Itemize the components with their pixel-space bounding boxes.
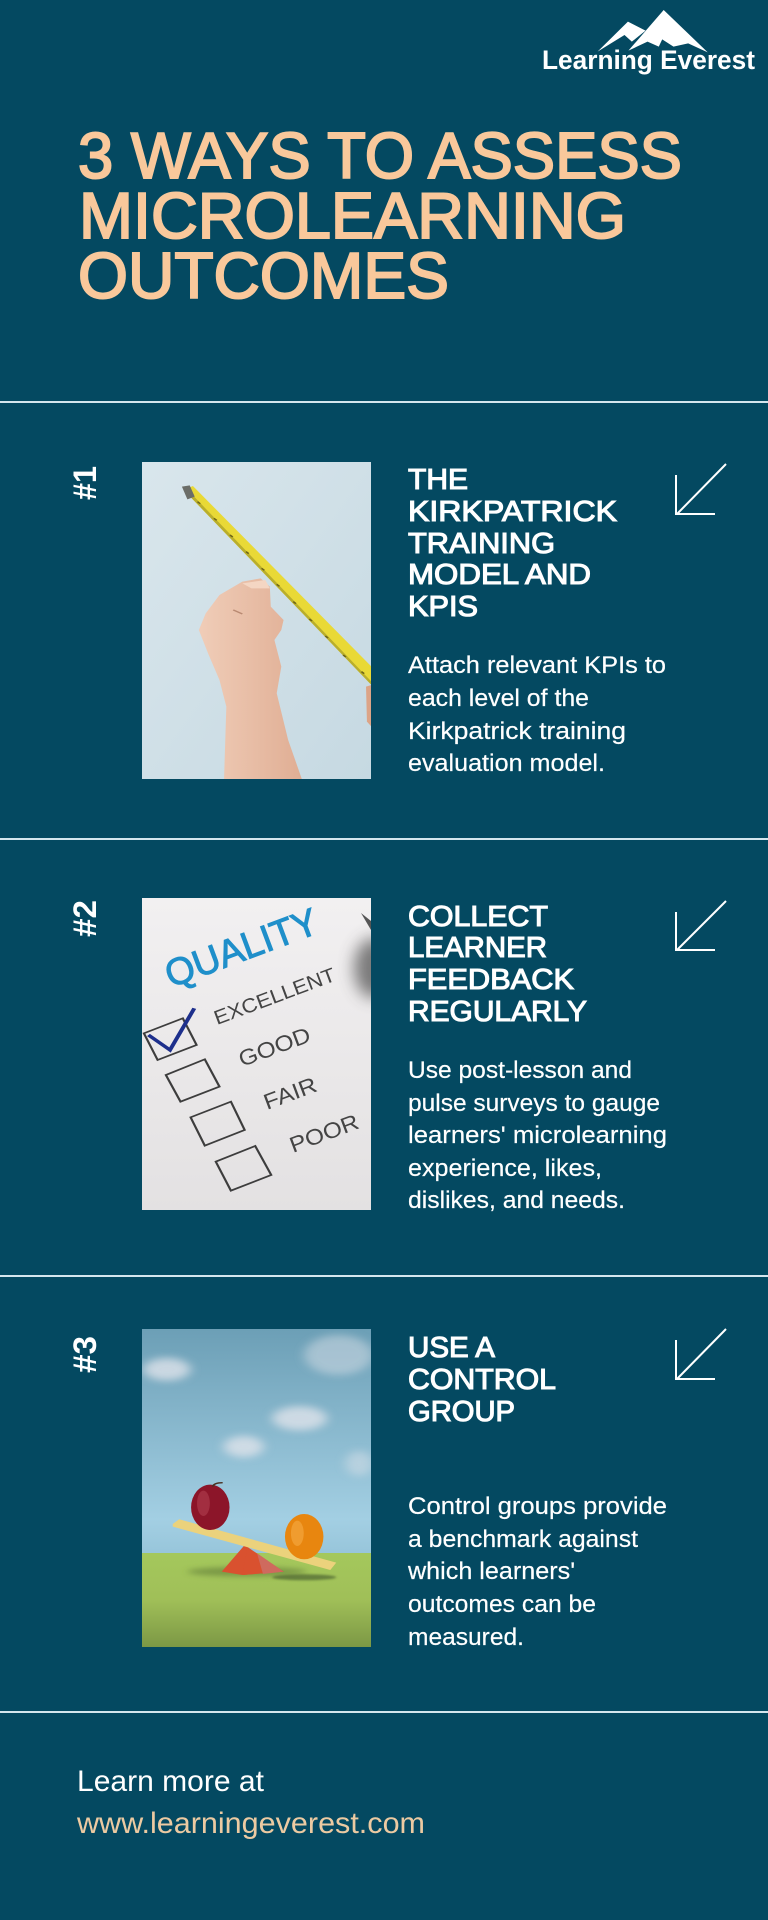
heading: KIRKPATRICK: [408, 496, 618, 528]
body text: measured.: [408, 1624, 524, 1651]
icon: mountain peaks: [598, 10, 708, 52]
body text: which learners': [407, 1558, 575, 1585]
heading: COLLECT: [408, 901, 548, 933]
arrow: [675, 901, 726, 951]
footer label: Learn more at: [77, 1765, 265, 1798]
number 3: #3: [67, 1336, 103, 1373]
title: [78, 119, 682, 312]
photo: apple and orange on a seesaw: [142, 1329, 373, 1647]
body text: Kirkpatrick training: [408, 718, 626, 745]
photo: quality checklist: GOOD: [235, 1022, 314, 1072]
title: OUTCOMES: [78, 239, 449, 312]
logo wordmark: Learning Everest: [542, 45, 755, 75]
photo: quality checklist: [142, 898, 394, 1210]
body text: experience, likes,: [408, 1155, 602, 1182]
heading: [408, 464, 618, 623]
heading: LEARNER: [408, 932, 547, 964]
body text: [408, 1057, 667, 1214]
footer website: www.learningeverest.com: [76, 1807, 425, 1840]
body text: outcomes can be: [408, 1591, 596, 1618]
body text: a benchmark against: [408, 1526, 638, 1553]
body text: each level of the: [408, 685, 589, 712]
heading: TRAINING: [408, 528, 555, 560]
photo: quality checklist: POOR: [286, 1109, 362, 1158]
number 2: #2: [67, 900, 103, 937]
title: MICROLEARNING: [79, 179, 626, 252]
body text: Use post-lesson and: [408, 1057, 632, 1084]
photo: quality checklist: FAIR: [260, 1072, 320, 1115]
body text: Control groups provide: [408, 1493, 667, 1520]
footer: learn more: [76, 1765, 425, 1840]
body text: pulse surveys to gauge: [408, 1090, 660, 1117]
heading: USE A: [408, 1332, 496, 1364]
panel: section 3: [67, 1329, 726, 1651]
number 1: #1: [67, 466, 103, 500]
heading: FEEDBACK: [408, 964, 575, 996]
photo: hand holding measuring tape: [142, 462, 372, 779]
title: 3 WAYS TO ASSESS: [78, 119, 682, 192]
heading: [408, 901, 587, 1028]
panel: section 1: [67, 462, 726, 779]
photo: quality checklist: EXCELLENT: [211, 964, 339, 1030]
arrow: [675, 464, 726, 515]
body text: evaluation model.: [408, 750, 605, 777]
body text: [407, 1493, 667, 1651]
heading: THE: [408, 464, 468, 496]
heading: CONTROL: [408, 1364, 556, 1396]
body text: learners' microlearning: [408, 1122, 667, 1149]
heading: GROUP: [408, 1396, 515, 1428]
arrow: [675, 1329, 726, 1380]
panel: section 2: [67, 898, 726, 1214]
body text: [408, 652, 666, 777]
heading: [408, 1332, 556, 1428]
heading: KPIS: [408, 591, 478, 623]
body text: dislikes, and needs.: [408, 1187, 625, 1214]
photo: quality checklist: QUALITY: [159, 901, 324, 996]
body text: Attach relevant KPIs to: [408, 652, 666, 679]
heading: REGULARLY: [408, 996, 587, 1028]
heading: MODEL AND: [408, 559, 591, 591]
logo: Learning Everest: [542, 10, 755, 75]
pen blur: [344, 929, 371, 1008]
